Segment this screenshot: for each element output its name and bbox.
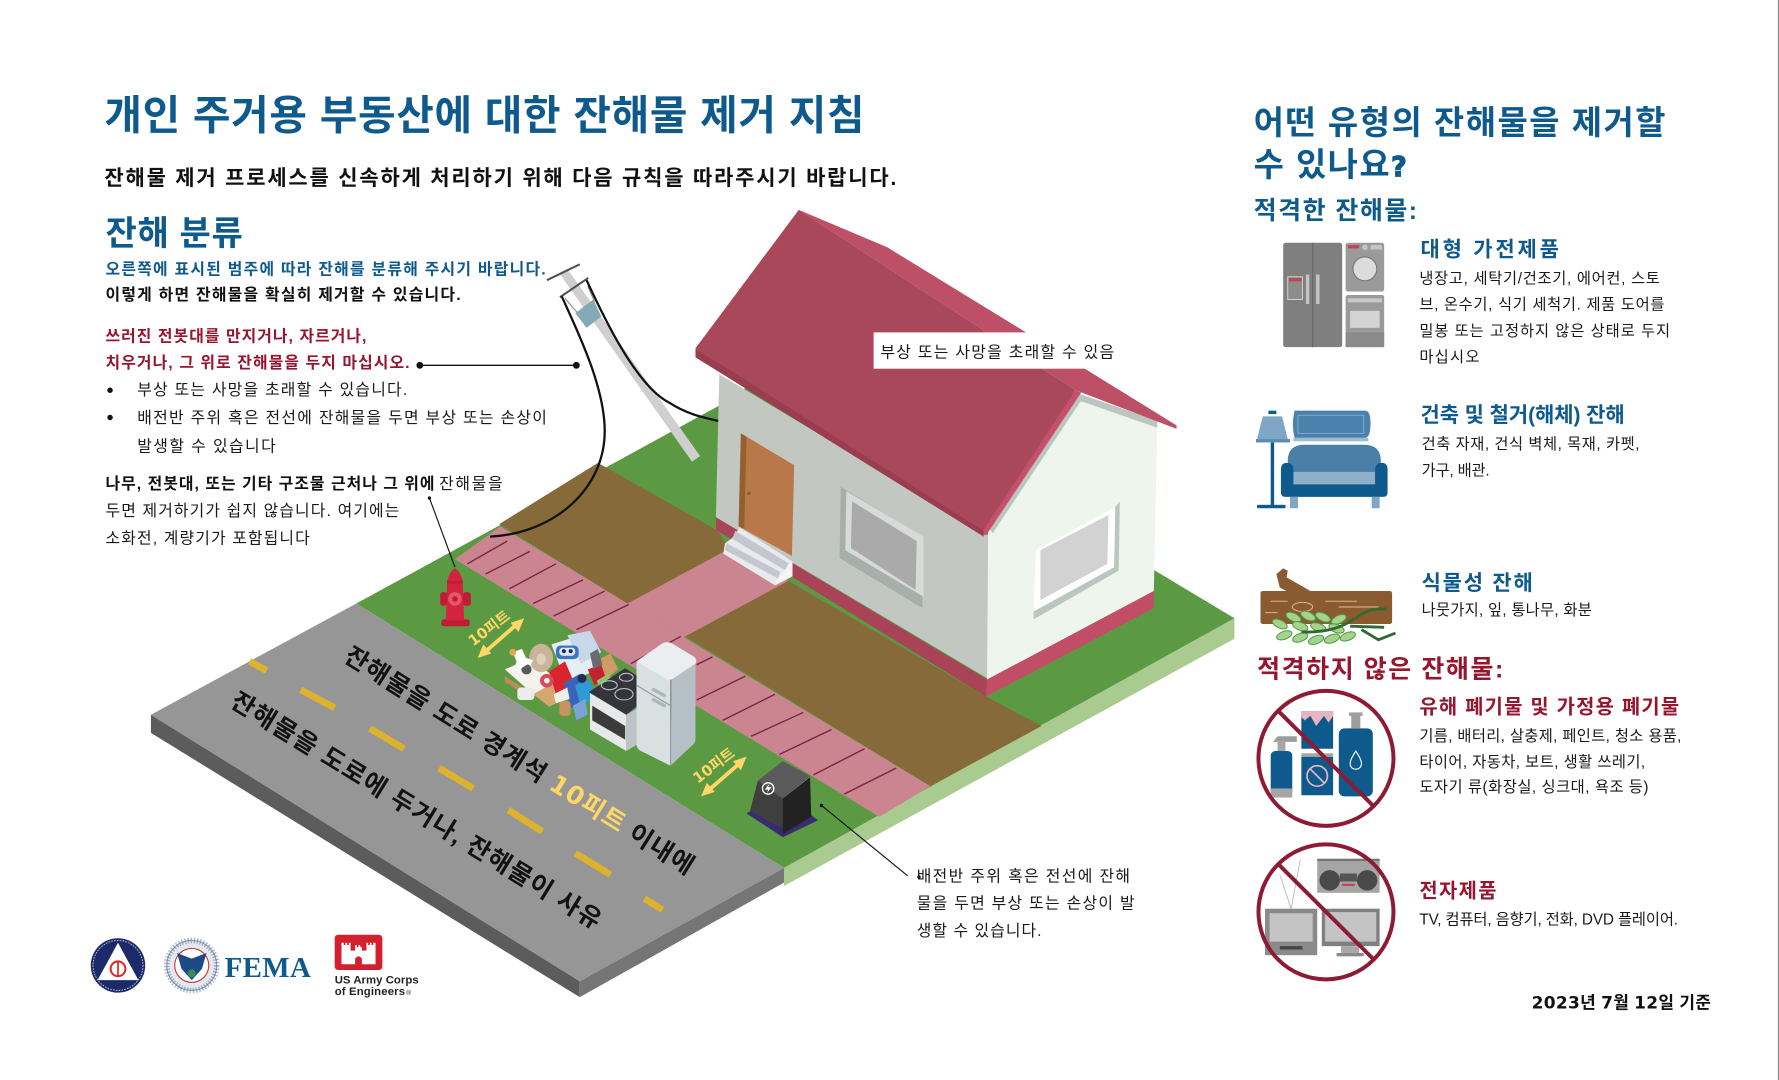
- text: large appliances: 브, 온수기, 식기 세척기. 제품 도어를: [1419, 297, 1664, 314]
- structures warning: [106, 475, 503, 547]
- heading: eligible debris: 적격한 잔해물:: [1254, 197, 1417, 225]
- icon: electronics prohibited: [1258, 844, 1393, 979]
- text: large appliances: 마십시오: [1419, 349, 1479, 366]
- logo: US Army Corps of Engineers: ®: [406, 989, 411, 997]
- label: injury or death: [874, 332, 1114, 369]
- fire hydrant: [440, 568, 471, 626]
- downed pole warning: 부상 또는 사망을 초래할 수 있습니다.: [137, 381, 407, 399]
- text: hazardous and household waste: 기름, 배터리, 살충제, 페인트, 청소 용품,: [1419, 728, 1681, 745]
- text: large appliances: 대형 가전제품: [1420, 238, 1559, 261]
- icon: vegetative debris: [1261, 568, 1396, 646]
- sorting instructions: 오른쪽에 표시된 범주에 따라 잔해를 분류해 주시기 바랍니다.: [106, 261, 546, 279]
- icon: furniture and construction: [1256, 411, 1388, 508]
- house walls: [716, 374, 989, 680]
- logos: [91, 935, 419, 998]
- downed pole warning: 치우거나, 그 위로 잔해물을 두지 마십시오.: [106, 354, 410, 372]
- road text: do not place on road: 잔해물을 도로에 두거나, 잔해물이 사유: [226, 687, 606, 935]
- right heading: 수 있나요?: [1254, 146, 1407, 183]
- text: large appliances: 냉장고, 세탁기/건조기, 에어컨, 스토: [1419, 271, 1660, 288]
- right heading: 어떤 유형의 잔해물을 제거할: [1254, 104, 1666, 141]
- text: hazardous and household waste: 도자기 류(화장실, 싱크대, 욕조 등): [1419, 779, 1649, 796]
- utility pole: [547, 264, 700, 462]
- transformer note: 배전반 주위 혹은 전선에 잔해: [917, 867, 1130, 885]
- text: construction and demolition debris: 건축 및 철거(해체) 잔해: [1420, 404, 1625, 427]
- side window: [1034, 501, 1120, 619]
- text: electronics: 전자제품: [1419, 880, 1496, 902]
- leader line to transformer: [820, 804, 921, 879]
- leader line to pole: [416, 362, 580, 369]
- title: 개인 주거용 부동산에 대한 잔해물 제거 지침: [104, 92, 865, 138]
- pad-mounted transformer: [747, 761, 818, 837]
- text: construction and demolition debris: 건축 자재, 건식 벽체, 목재, 카펫,: [1422, 436, 1639, 453]
- 10 foot arrow near hydrant: 10피트: [465, 608, 514, 650]
- sorting instructions: [106, 261, 546, 304]
- text: vegetative debris: [1422, 572, 1592, 619]
- logo: US Army Corps of Engineers: US Army Corps: [335, 975, 419, 987]
- structures warning: 나무, 전봇대, 또는 기타 구조물 근처나 그 위에: [106, 475, 435, 493]
- front window: [840, 487, 924, 608]
- right heading: [1254, 104, 1666, 183]
- transformer note: 물을 두면 부상 또는 손상이 발: [917, 895, 1135, 913]
- brown garden beds: [499, 463, 1042, 786]
- downed pole warning: 쓰러진 전봇대를 만지거나, 자르거나,: [106, 327, 366, 345]
- text: vegetative debris: 식물성 잔해: [1422, 572, 1533, 595]
- structures warning: 두면 제거하기가 쉽지 않습니다. 여기에는: [106, 502, 399, 520]
- front steps: [723, 528, 792, 585]
- heading: debris sorting: 잔해 분류: [106, 215, 243, 253]
- logo: FEMA: FEMA: [225, 952, 311, 984]
- 10 foot arrow near transformer: 10피트: [690, 745, 738, 787]
- 10 foot arrow near hydrant: [465, 608, 524, 658]
- text: vegetative debris: 나뭇가지, 잎, 통나무, 화분: [1422, 602, 1592, 619]
- lawn platform: [356, 340, 1234, 886]
- text: construction and demolition debris: [1420, 404, 1639, 479]
- downed pole warning: 배전반 주위 혹은 전선에 잔해물을 두면 부상 또는 손상이: [137, 409, 547, 427]
- roof: [695, 210, 1177, 537]
- logo: civil defense seal: [91, 938, 145, 993]
- text: hazardous and household waste: 타이어, 자동차, 보트, 생활 쓰레기,: [1419, 754, 1645, 771]
- house: [695, 210, 1177, 697]
- downed pole warning: 발생할 수 있습니다: [137, 438, 276, 456]
- date note: 2023년 7월 12일 기준: [1532, 994, 1711, 1014]
- structures warning: 잔해물을: [439, 475, 503, 493]
- road text: place debris within 10 feet: 잔해물을 도로 경계석 10피트 이내에: [339, 641, 699, 881]
- sidewalk and walkway: [455, 526, 930, 817]
- refrigerator: [636, 642, 696, 766]
- street: [151, 604, 784, 997]
- door: [739, 433, 794, 556]
- text: large appliances: 밀봉 또는 고정하지 않은 상태로 두지: [1419, 323, 1670, 340]
- icon: hazardous waste prohibited: [1258, 691, 1393, 826]
- label: injury or death: 부상 또는 사망을 초래할 수 있음: [880, 343, 1114, 361]
- transformer note: [917, 867, 1135, 940]
- text: electronics: TV, 컴퓨터, 음향기, 전화, DVD 플레이어.: [1419, 912, 1678, 929]
- isometric property illustration: [151, 210, 1234, 997]
- downed pole warning: [106, 327, 547, 456]
- leader line to hydrant: [428, 496, 455, 567]
- transformer note: 생할 수 있습니다.: [917, 922, 1042, 940]
- logo: US Army Corps of Engineers: of Engineers: [335, 986, 405, 998]
- 10 foot arrow near transformer: [690, 745, 747, 796]
- text: electronics: [1419, 880, 1678, 929]
- house foundation: [716, 517, 987, 697]
- text: large appliances: [1419, 238, 1670, 366]
- text: hazardous and household waste: [1419, 697, 1681, 796]
- structures warning: 소화전, 계량기가 포함됩니다: [106, 529, 310, 547]
- sorting instructions: 이렇게 하면 잔해물을 확실히 제거할 수 있습니다.: [106, 286, 461, 304]
- logo: DHS seal: [167, 940, 217, 990]
- text: construction and demolition debris: 가구, 배관.: [1422, 462, 1490, 479]
- icon: large appliances: [1283, 243, 1384, 347]
- subtitle: 잔해물 제거 프로세스를 신속하게 처리하기 위해 다음 규칙을 따라주시기 바랍니다.: [104, 167, 896, 190]
- power lines: [490, 280, 718, 537]
- logo: US Army Corps of Engineers: [335, 935, 419, 998]
- text: hazardous and household waste: 유해 폐기물 및 가정용 폐기물: [1419, 697, 1679, 719]
- heading: ineligible debris: 적격하지 않은 잔해물:: [1257, 655, 1503, 683]
- stove: [589, 668, 638, 751]
- debris pile: [505, 631, 618, 720]
